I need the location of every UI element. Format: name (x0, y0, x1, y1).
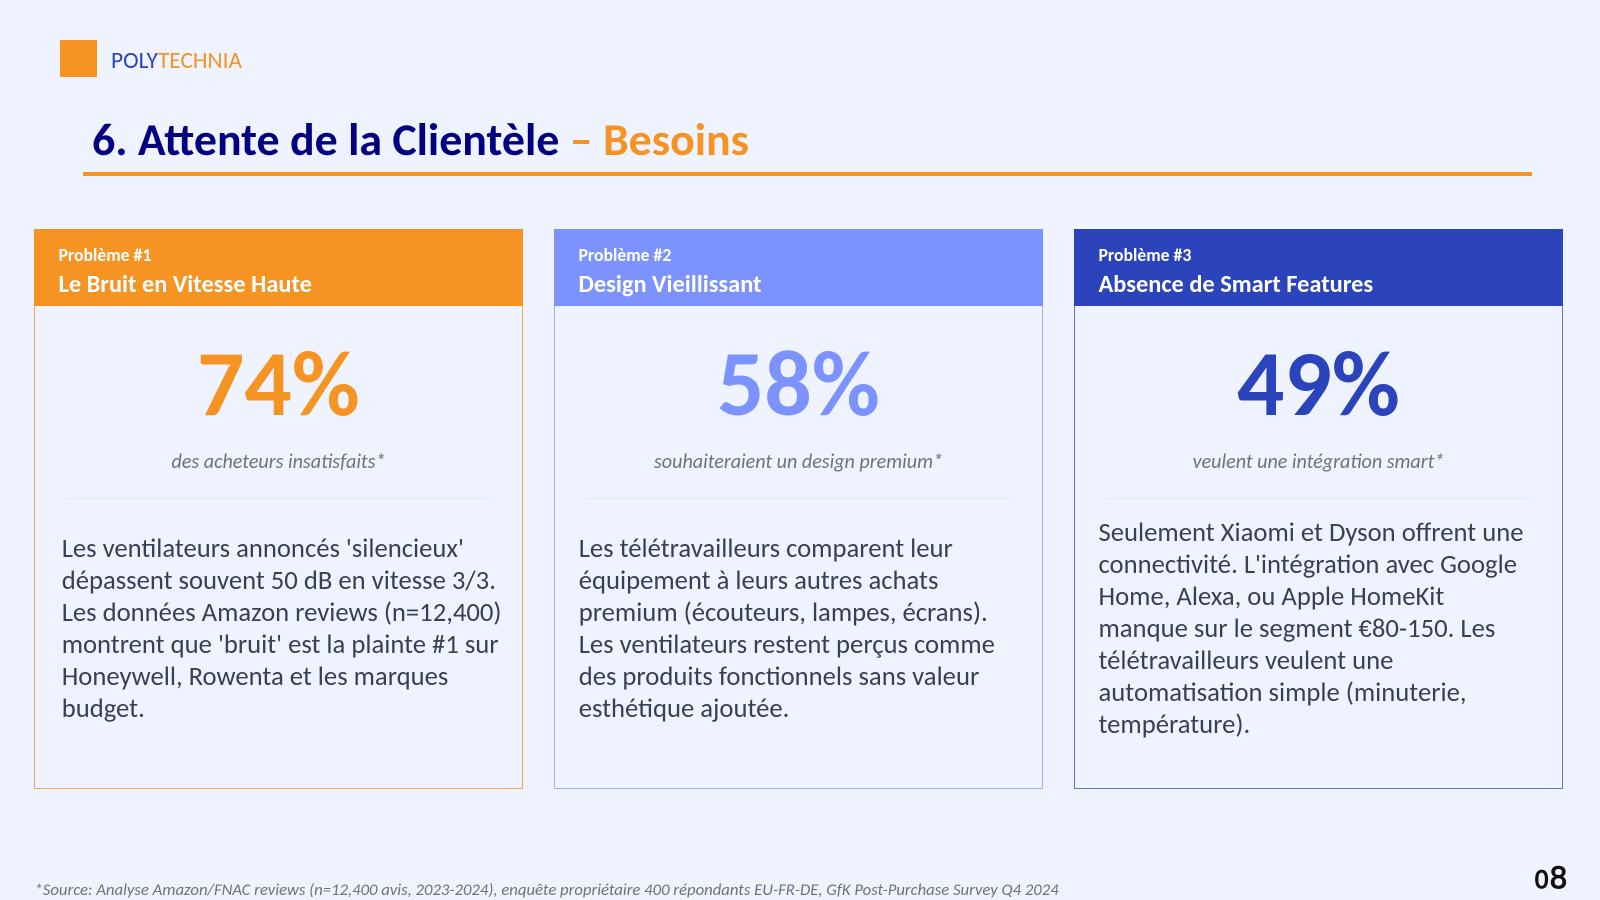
body text: Les ventilateurs restent perçus comme (579, 629, 995, 661)
source footnote: *Source: Analyse Amazon/FNAC reviews (n=12,400 avis, 2023-2024), enquête propriétaire 400 répondants EU-FR-DE, GfK Post-Purchase Survey Q4 2024 (34, 880, 1059, 900)
title: 6. Attente de la Clientèle – Besoins (92, 112, 749, 168)
body text: des produits fonctionnels sans valeur (579, 661, 979, 693)
panel: problème 3 (1074, 229, 1563, 789)
problem title: Design Vieillissant (578, 269, 762, 299)
logo wordmark: POLYTECHNIA (111, 47, 242, 75)
body text: montrent que 'bruit' est la plainte #1 sur (62, 629, 499, 661)
body text: télétravailleurs veulent une (1098, 645, 1393, 677)
statistic 74%: 74% (197, 327, 360, 441)
body text: dépassent souvent 50 dB en vitesse 3/3. (62, 565, 496, 597)
body text: Honeywell, Rowenta et les marques (62, 661, 448, 693)
body text: manque sur le segment €80-150. Les (1098, 613, 1495, 645)
statistic caption: souhaiteraient un design premium* (654, 450, 943, 474)
problem number: Problème #3 (1098, 244, 1191, 266)
body text (62, 533, 501, 725)
logo (60, 40, 242, 77)
body text: température). (1098, 709, 1250, 741)
body text (1098, 517, 1524, 741)
card header 3 (1074, 229, 1563, 306)
body text: budget. (62, 693, 145, 725)
body text: Seulement Xiaomi et Dyson offrent une (1098, 517, 1524, 549)
card header 2 (554, 229, 1043, 306)
body text: automatisation simple (minuterie, (1098, 677, 1467, 709)
statistic 58%: 58% (717, 327, 880, 441)
body text: équipement à leurs autres achats (579, 565, 938, 597)
statistic caption: veulent une intégration smart* (1193, 450, 1444, 474)
body text: Les ventilateurs annoncés 'silencieux' (62, 533, 464, 565)
body text: Les données Amazon reviews (n=12,400) (62, 597, 501, 629)
panel: problème 1 (34, 229, 523, 789)
body text: connectivité. L'intégration avec Google (1098, 549, 1517, 581)
page number: 08 (1534, 861, 1568, 895)
body text: premium (écouteurs, lampes, écrans). (579, 597, 988, 629)
problem title: Le Bruit en Vitesse Haute (58, 269, 312, 299)
panel: problème 2 (554, 229, 1043, 789)
problem number: Problème #2 (578, 244, 671, 266)
problem title: Absence de Smart Features (1098, 269, 1373, 299)
body text: Les télétravailleurs comparent leur (579, 533, 953, 565)
card header 1 (34, 229, 523, 306)
body text: Home, Alexa, ou Apple HomeKit (1098, 581, 1444, 613)
body text (579, 533, 995, 725)
body text: esthétique ajoutée. (579, 693, 789, 725)
logo mark (60, 40, 97, 77)
statistic 49%: 49% (1237, 327, 1400, 441)
statistic caption: des acheteurs insatisfaits* (172, 450, 386, 474)
problem number: Problème #1 (58, 244, 151, 266)
